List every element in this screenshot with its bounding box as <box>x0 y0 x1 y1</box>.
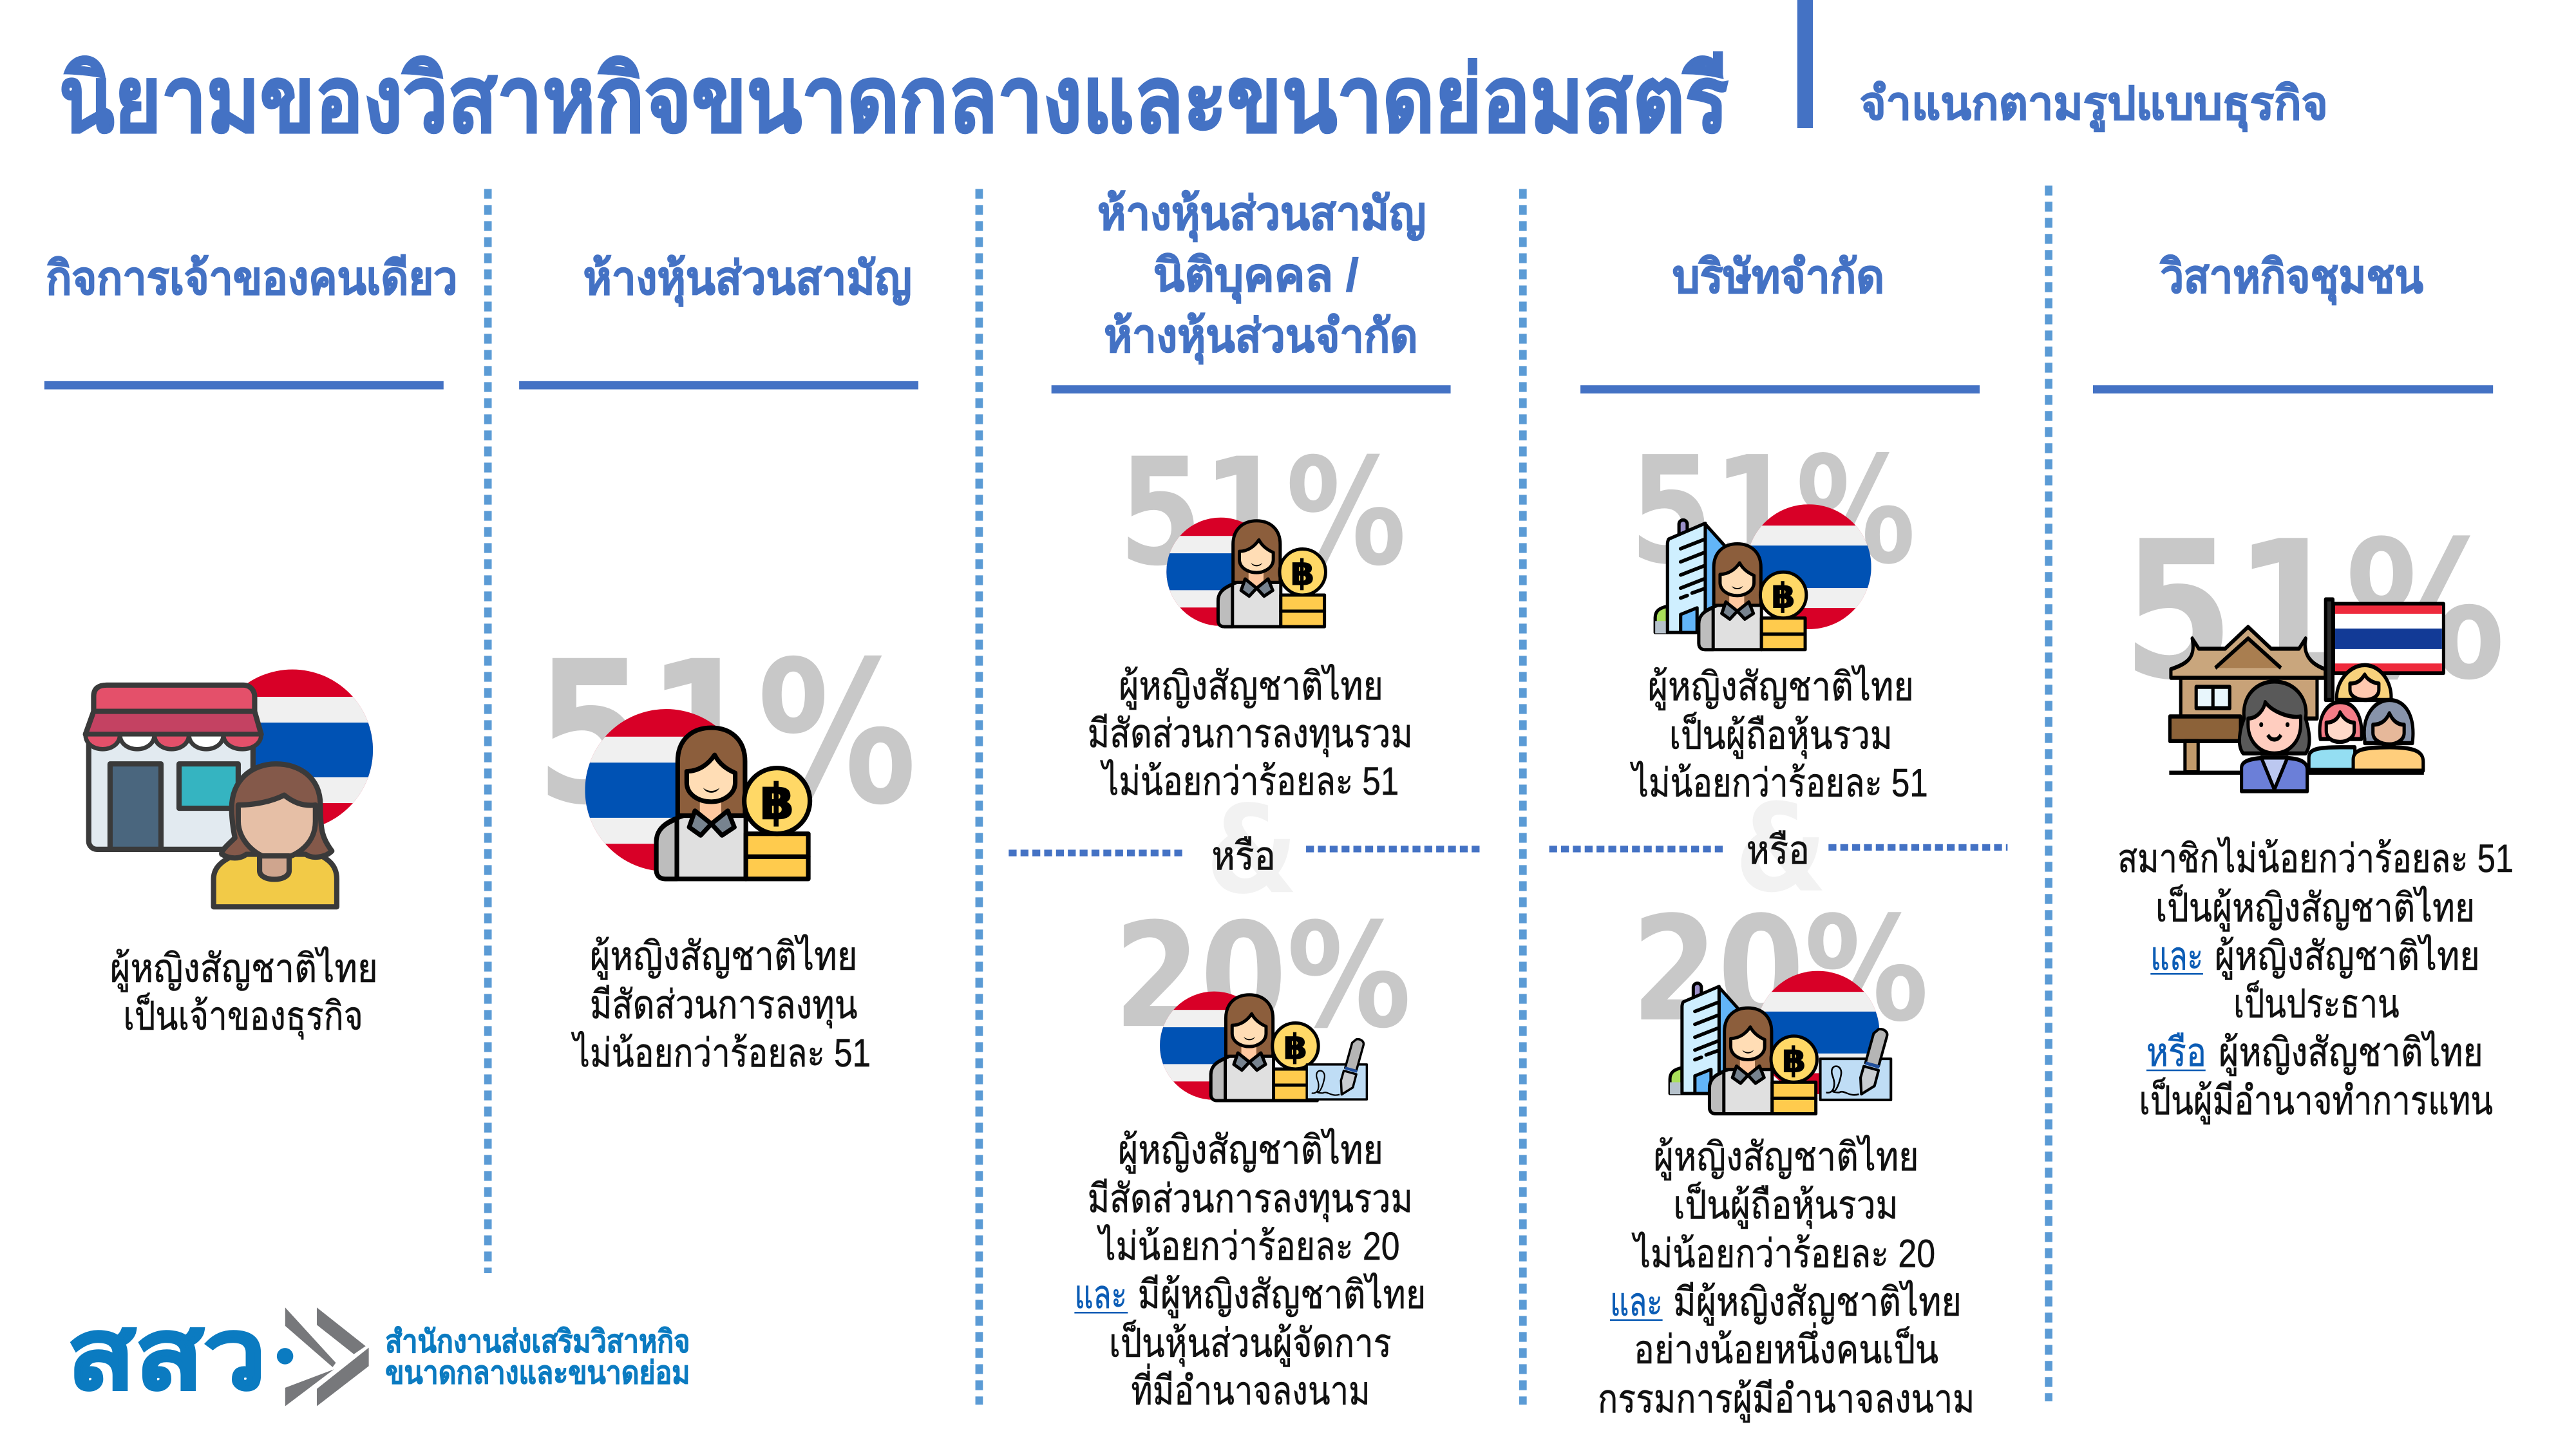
description: 20 percent criterion: มีผู้หญิงสัญชาติไทย <box>1673 1280 1962 1326</box>
description: 51 percent criterion: ผู้หญิงสัญชาติไทย <box>1648 664 1914 710</box>
20 percent watermark: 20% <box>1114 892 1411 1060</box>
icon: Thai flag, tower, businesswoman and signature: ฿ <box>1782 1039 1806 1080</box>
icon: Thai flag and businesswoman with baht coin <box>1166 518 1325 627</box>
description: หรือ <box>2146 1030 2206 1074</box>
logo dot <box>277 1348 293 1365</box>
subtitle: จำแนกตามรูปแบบธุรกิจ <box>1860 78 2328 132</box>
icon: Thai flag, office tower and businesswoman: ฿ <box>1771 576 1795 616</box>
description: เป็นเจ้าของธุรกิจ <box>123 994 363 1040</box>
logo organisation name <box>385 1324 690 1390</box>
description: 20 percent criterion <box>1598 1134 1975 1423</box>
description: 51 percent criterion: ไม่น้อยกว่าร้อยละ 51 <box>1100 759 1399 803</box>
title separator bar <box>1797 0 1813 128</box>
description: 20 percent criterion: มีสัดส่วนการลงทุนรวม <box>1088 1177 1413 1222</box>
description: 51 percent criterion: เป็นผู้ถือหุ้นรวม <box>1669 712 1893 759</box>
logo organisation name: สำนักงานส่งเสริมวิสาหกิจ <box>385 1324 690 1359</box>
ampersand watermark: & <box>1206 779 1298 921</box>
logo organisation name: ขนาดกลางและขนาดย่อม <box>385 1356 690 1390</box>
description: 20 percent criterion <box>1074 1128 1426 1412</box>
20 percent watermark: 20% <box>1631 886 1929 1054</box>
description: ผู้หญิงสัญชาติไทย <box>2215 934 2480 980</box>
icon: Thai flag and businesswoman with baht coin: ฿ <box>760 774 794 831</box>
51 percent watermark: 51% <box>536 620 916 849</box>
heading: limited partnership: ห้างหุ้นส่วนสามัญ <box>1097 188 1426 242</box>
or label: หรือ <box>1747 828 1810 872</box>
description: 20 percent criterion: ไม่น้อยกว่าร้อยละ 20 <box>1096 1224 1399 1268</box>
description: 51 percent criterion <box>1629 664 1928 804</box>
description: 20 percent criterion: กรรมการผู้มีอำนาจลงนาม <box>1598 1377 1975 1423</box>
description: 20 percent criterion: ที่มีอำนาจลงนาม <box>1131 1363 1370 1412</box>
51 percent watermark: 51% <box>2123 500 2505 722</box>
51 percent watermark: 51% <box>1119 427 1406 599</box>
panel: sole proprietorship <box>44 253 457 1040</box>
ampersand watermark: & <box>1735 778 1827 920</box>
description: 51 percent criterion <box>1088 663 1413 803</box>
description <box>571 934 871 1075</box>
description: 20 percent criterion: ผู้หญิงสัญชาติไทย <box>1118 1128 1383 1174</box>
description: 20 percent criterion: ผู้หญิงสัญชาติไทย <box>1654 1134 1919 1180</box>
heading: sole proprietorship: กิจการเจ้าของคนเดียว <box>46 253 457 305</box>
panel: ordinary partnership <box>519 253 918 1075</box>
heading rule <box>1052 385 1451 393</box>
heading rule <box>1580 385 1980 393</box>
icon: Thai flag and businesswoman with baht coin <box>585 709 810 879</box>
description: ผู้หญิงสัญชาติไทย <box>590 934 858 980</box>
description: มีสัดส่วนการลงทุน <box>590 983 858 1028</box>
icon: Thai flag, businesswoman and signature <box>1160 992 1367 1101</box>
icon: Thai flag, office tower and businesswoman <box>1655 504 1871 650</box>
heading: limited partnership: นิติบุคคล / <box>1153 250 1359 304</box>
heading: ordinary partnership: ห้างหุ้นส่วนสามัญ <box>583 253 912 307</box>
description <box>110 946 378 1040</box>
logo chevrons <box>285 1307 369 1406</box>
heading rule <box>2093 385 2493 393</box>
panel: limited partnership <box>1009 188 1484 1412</box>
icon: Thai house, flag and group of women <box>2169 600 2443 791</box>
heading rule <box>44 381 444 390</box>
description: 20 percent criterion: เป็นผู้ถือหุ้นรวม <box>1673 1182 1899 1229</box>
icon: shop and woman with Thai flag <box>86 670 373 907</box>
description: 20 percent criterion: และ <box>1074 1273 1127 1316</box>
logo: OSMEP <box>68 1300 690 1410</box>
description: 51 percent criterion: ผู้หญิงสัญชาติไทย <box>1119 663 1383 710</box>
panel: limited company <box>1549 251 2007 1423</box>
51 percent watermark: 51% <box>1630 425 1915 597</box>
description: 20 percent criterion: อย่างน้อยหนึ่งคนเป็น <box>1634 1323 1938 1372</box>
panel: community enterprise <box>2093 251 2514 1124</box>
icon: Thai flag and businesswoman with baht coin: ฿ <box>1291 553 1314 593</box>
heading rule <box>519 381 918 390</box>
description: 20 percent criterion: มีผู้หญิงสัญชาติไทย <box>1138 1272 1426 1318</box>
logo wordmark: สสว <box>68 1300 266 1410</box>
description: 20 percent criterion: เป็นหุ้นส่วนผู้จัดการ <box>1109 1320 1392 1367</box>
description: ผู้หญิงสัญชาติไทย <box>2219 1030 2483 1076</box>
icon: Thai flag, businesswoman and signature: ฿ <box>1283 1027 1307 1067</box>
description: และ <box>2150 934 2203 978</box>
description: 51 percent criterion: ไม่น้อยกว่าร้อยละ 51 <box>1629 760 1928 804</box>
heading: limited partnership: ห้างหุ้นส่วนจำกัด <box>1104 310 1418 365</box>
description: 20 percent criterion: ไม่น้อยกว่าร้อยละ 20 <box>1631 1231 1935 1275</box>
description: ผู้หญิงสัญชาติไทย <box>110 946 378 992</box>
heading: limited partnership <box>1097 188 1426 365</box>
description: 51 percent criterion: มีสัดส่วนการลงทุนรวม <box>1088 712 1413 757</box>
description: เป็นผู้หญิงสัญชาติไทย <box>2155 885 2475 931</box>
description: ไม่น้อยกว่าร้อยละ 51 <box>571 1030 871 1075</box>
or label: หรือ <box>1211 834 1276 878</box>
icon: Thai flag, tower, businesswoman and signature <box>1670 971 1891 1113</box>
heading: limited company: บริษัทจำกัด <box>1672 251 1884 303</box>
description: เป็นผู้มีอำนาจทำการแทน <box>2139 1078 2493 1124</box>
description <box>2117 836 2514 1124</box>
description: 20 percent criterion: และ <box>1610 1280 1663 1324</box>
title: นิยามของวิสาหกิจขนาดกลางและขนาดย่อมสตรี <box>59 49 1728 151</box>
description: เป็นประธาน <box>2233 981 2400 1026</box>
heading: community enterprise: วิสาหกิจชุมชน <box>2160 251 2423 305</box>
